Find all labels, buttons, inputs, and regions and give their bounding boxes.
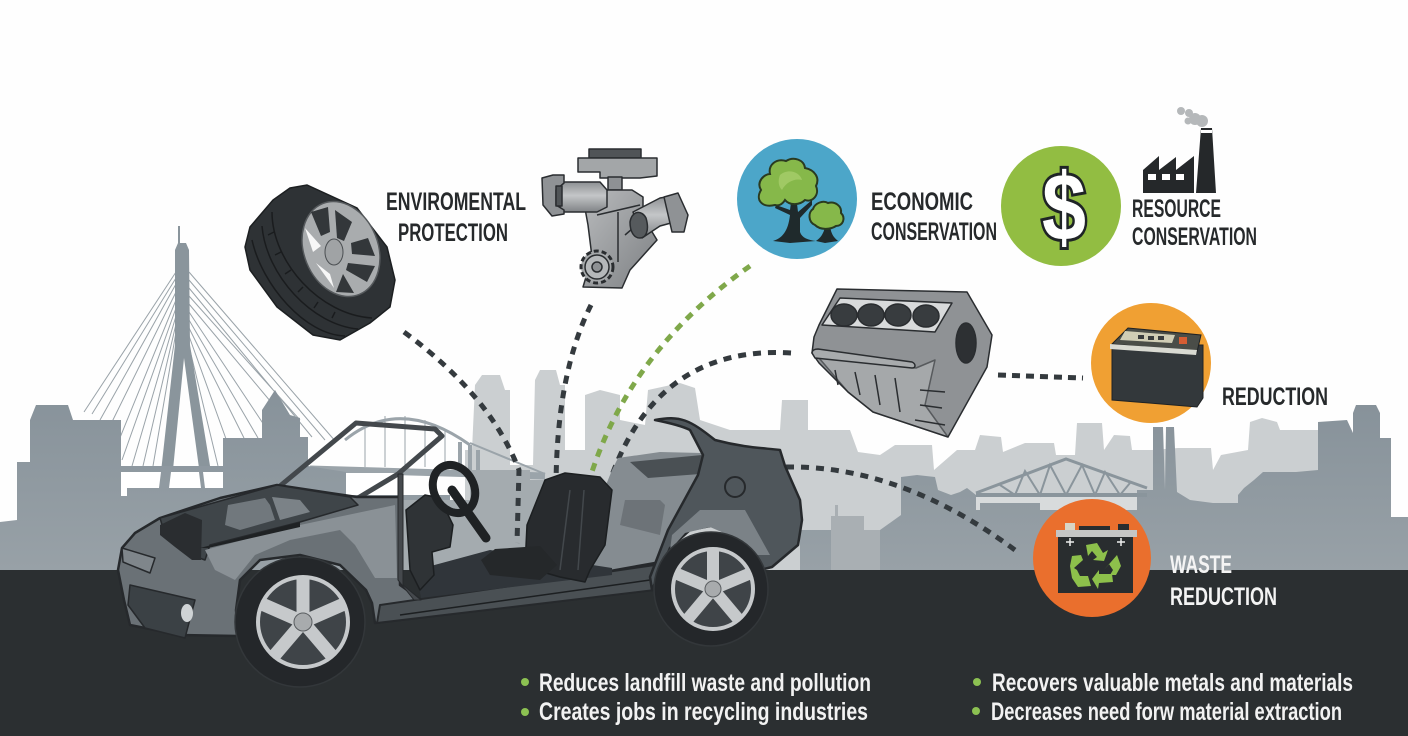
plus signs: [1066, 538, 1125, 546]
icon: transmission part: [542, 149, 688, 288]
heading: resource conservation: [1132, 195, 1257, 251]
car: [118, 418, 802, 687]
icon: factory with smoke: [1143, 107, 1216, 193]
heading: economic conservation: [871, 188, 997, 246]
rear seat: [525, 473, 612, 582]
car floor: [416, 550, 612, 598]
bullet list: right: [972, 669, 1353, 726]
icon: recycled battery on orange circle: [1033, 499, 1151, 617]
front wheel: [235, 557, 365, 687]
spokes: [262, 578, 344, 656]
bridge deck openings: [121, 472, 400, 496]
right skyline: [800, 405, 1408, 570]
car rear body: [650, 418, 802, 590]
heading: economic conservation: CONSERVATION: [871, 218, 997, 246]
large tree: [759, 159, 817, 243]
bullet list: left: Reduces landfill waste and pollution: [539, 669, 871, 697]
heading: environmental protection: [386, 188, 526, 247]
right cylinder: [633, 196, 682, 238]
heading: environmental protection: ENVIROMENTAL: [386, 188, 526, 216]
skyline: arch bridge behind car: [310, 416, 545, 476]
gear: [581, 251, 613, 283]
heading: resource conservation: CONSERVATION: [1132, 223, 1257, 251]
left cylinder: [560, 182, 607, 212]
dashed connector: transmission to car: [556, 305, 591, 490]
label: reduction: REDUCTION: [1222, 383, 1328, 411]
ground: [0, 570, 1408, 736]
bridge cables: [84, 272, 336, 466]
steering wheel: [425, 458, 483, 520]
heading: environmental protection: PROTECTION: [398, 219, 508, 247]
deck: [822, 298, 952, 332]
label: waste reduction: WASTE: [1170, 551, 1232, 579]
icon: dollar on green circle: [1001, 146, 1121, 266]
car A pillar: [398, 474, 421, 600]
car fuel cap: [725, 477, 745, 497]
rail: [812, 349, 915, 368]
steering column: [452, 490, 486, 538]
dashed connector: engine block to battery: [998, 375, 1083, 378]
small refinery: [831, 505, 880, 570]
heading: resource conservation: RESOURCE: [1132, 195, 1221, 223]
car windshield frame: [280, 423, 442, 498]
smoke: [1177, 107, 1208, 127]
front seat: [406, 495, 453, 590]
icon: dollar on green circle: $: [1042, 154, 1086, 261]
icon: engine block: [812, 289, 992, 437]
central low buildings: [400, 470, 560, 570]
car bonnet cut-out: [160, 485, 358, 560]
icon: battery on orange circle: [1091, 303, 1211, 423]
spokes: [675, 549, 751, 620]
label: waste reduction: [1170, 551, 1277, 611]
bridge tower: [159, 226, 214, 490]
skyline: suspension bridge left: [84, 226, 336, 490]
bullet list: left: [521, 669, 871, 726]
bullet list: left: Creates jobs in recycling industries: [539, 698, 868, 726]
rear seat cushion: [481, 546, 557, 580]
truss bridge right: [976, 459, 1147, 495]
side bore: [956, 323, 976, 363]
body: [583, 190, 657, 288]
left towers: [0, 390, 450, 570]
dashed connector: car to recycled battery: [786, 467, 1015, 550]
tyre tread lines: [252, 212, 372, 336]
label: waste reduction: REDUCTION: [1170, 583, 1277, 611]
cylinder bores: [831, 304, 939, 327]
dashed connector: engine block to car: [612, 353, 791, 475]
small tree: [809, 202, 843, 243]
car door sill: [377, 565, 655, 623]
rear wheel: [654, 532, 768, 646]
heading: economic conservation: ECONOMIC: [871, 188, 973, 216]
dashed connector: green: [590, 266, 750, 478]
icon: tyre: [245, 185, 395, 340]
car interior backdrop: [575, 452, 702, 572]
skyline: distant buildings: [465, 370, 1318, 570]
skyline: foreground buildings: [0, 390, 1408, 570]
car body front: [118, 485, 655, 636]
dashed connector: tyre to car: [404, 332, 519, 543]
car headlight: [122, 548, 155, 573]
car bumper: [128, 585, 195, 638]
recycle arrows: [1070, 543, 1121, 589]
icon: trees on blue circle: [737, 139, 857, 259]
tyre rim: [288, 190, 394, 308]
openings under truss: [976, 497, 1137, 510]
rim windows: [305, 207, 375, 293]
